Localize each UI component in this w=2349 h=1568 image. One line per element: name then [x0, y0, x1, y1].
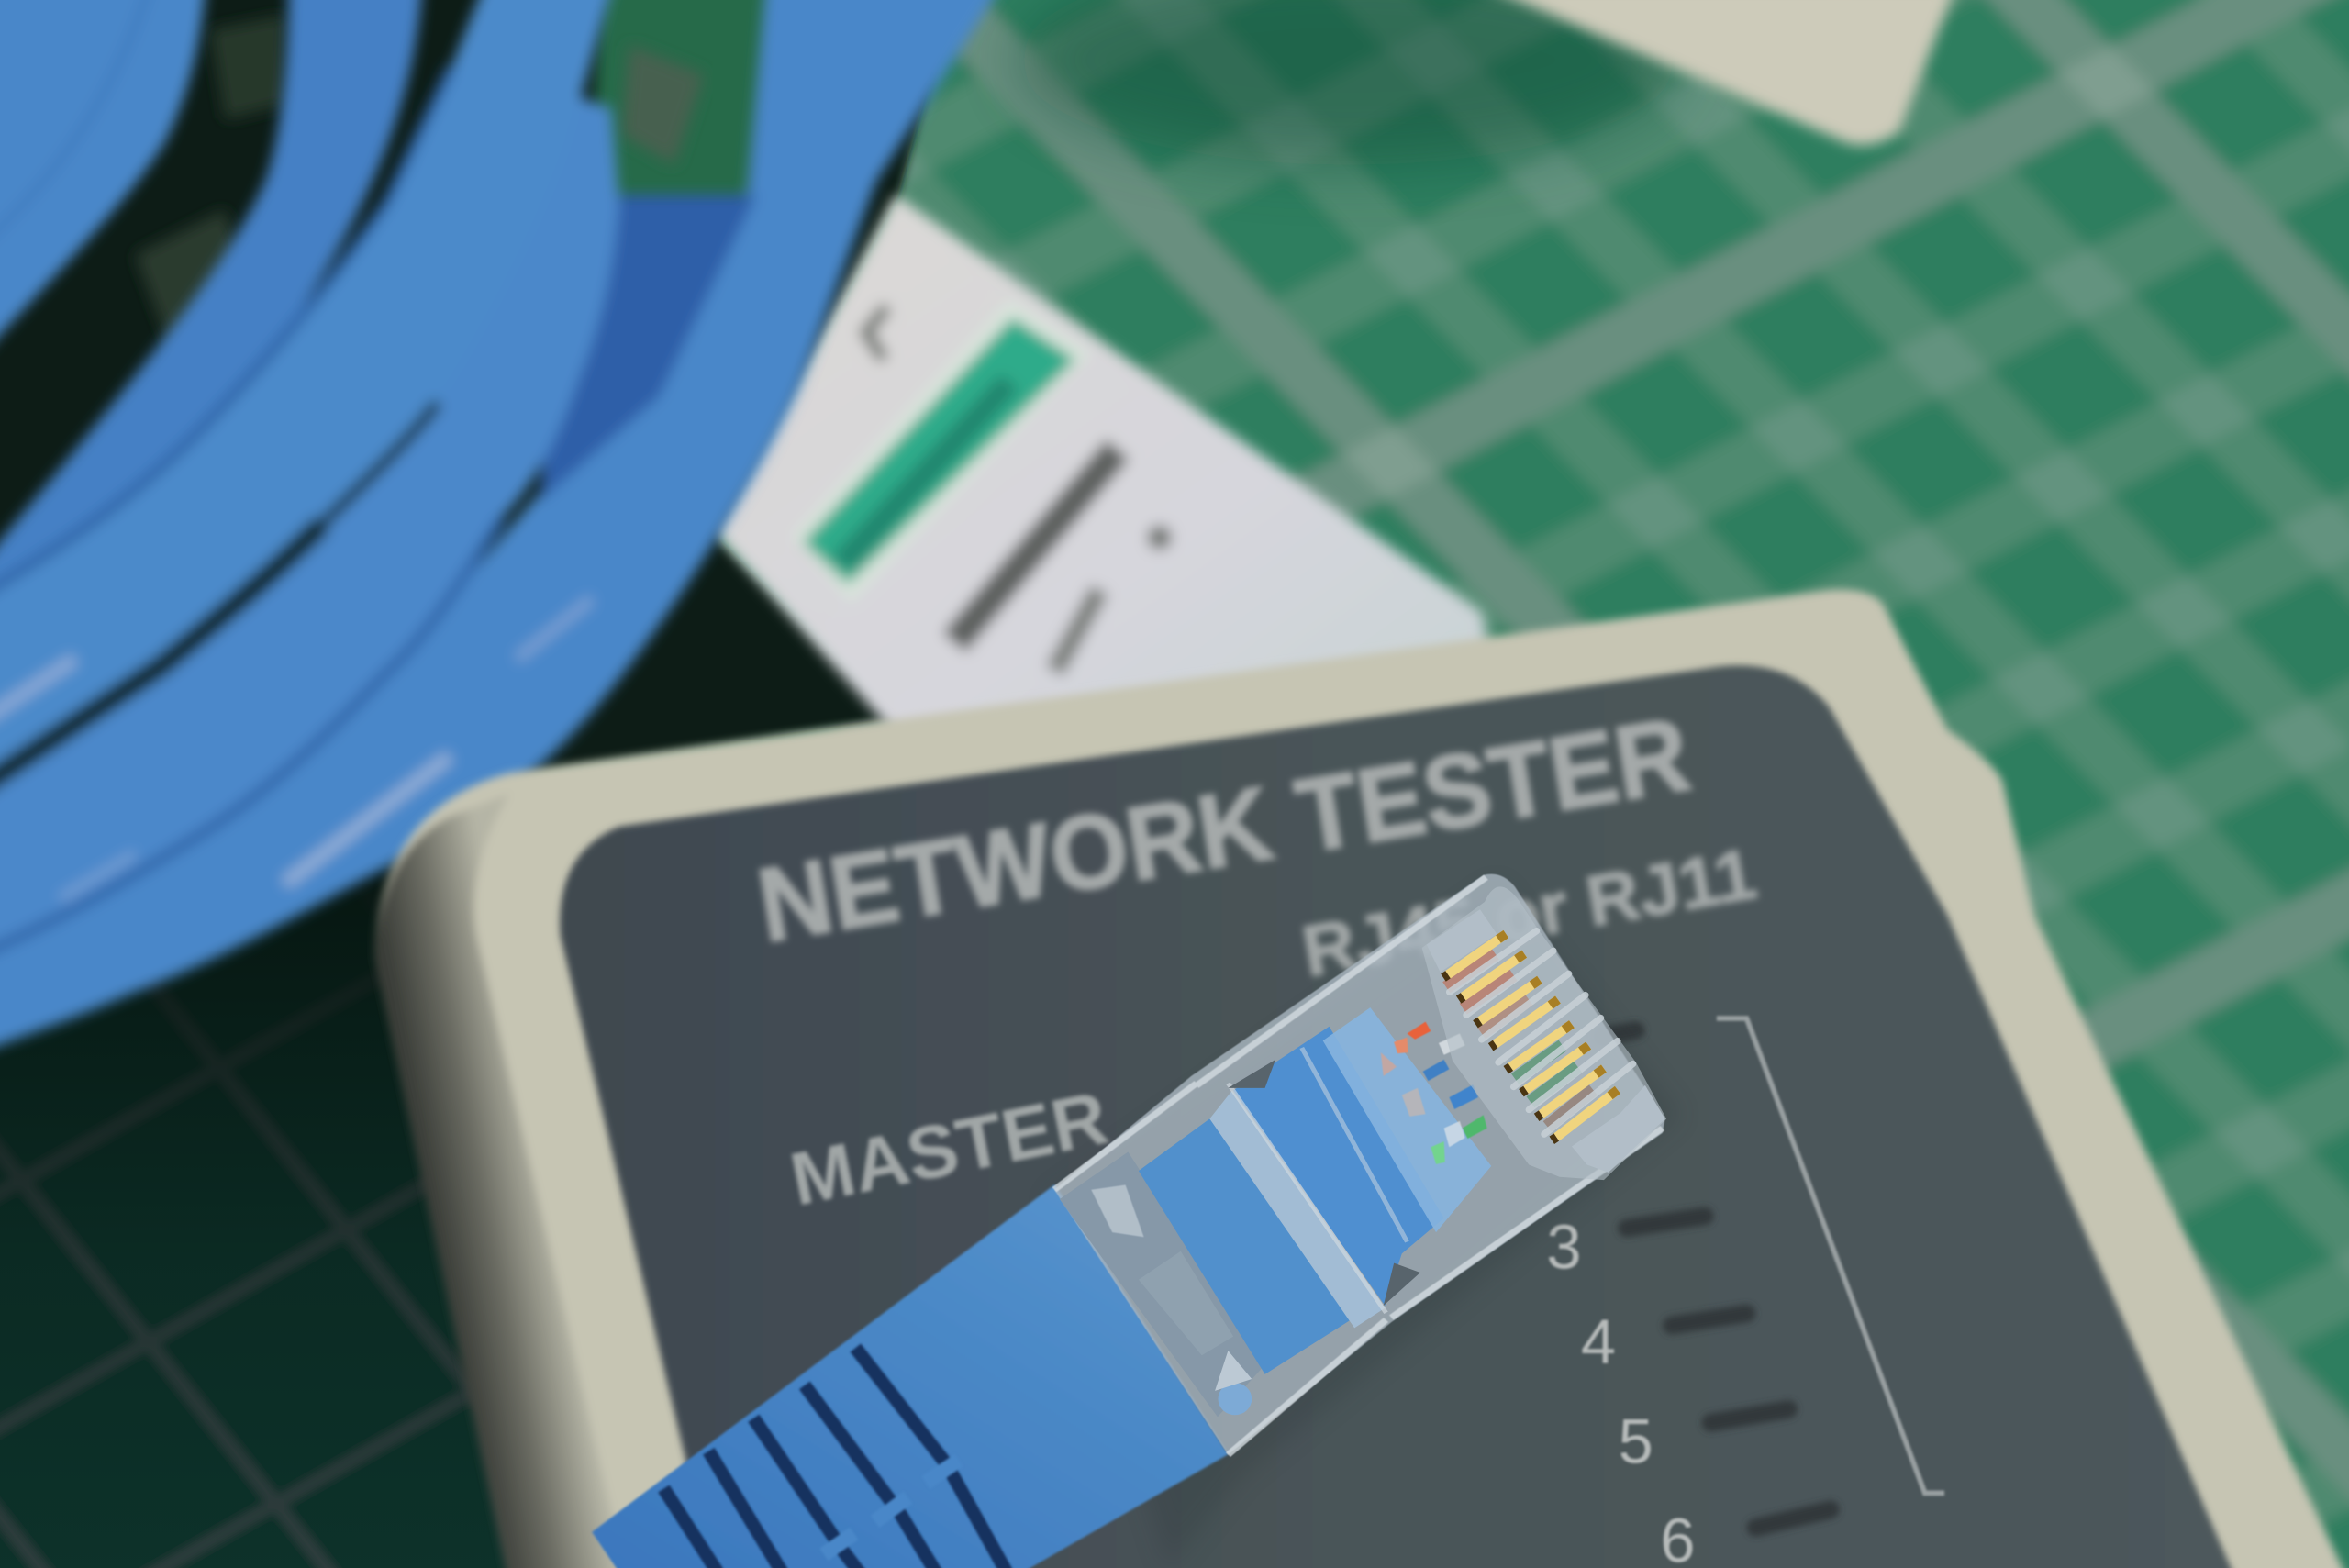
label: MASTER: MASTER	[784, 1076, 1115, 1222]
cable strand outer	[0, 0, 1011, 1056]
tester dark face	[560, 665, 2240, 1568]
network tester device	[374, 590, 2349, 1568]
boot ridge bridges	[824, 1460, 959, 1554]
bracket line beside LEDs	[1717, 1018, 1944, 1493]
coloured wires	[1381, 1022, 1487, 1164]
paper cable label	[715, 195, 1498, 756]
blue coiled network cables	[0, 0, 1011, 1056]
shell edge highlights	[1054, 877, 1663, 1455]
LED indicator slots	[1603, 1030, 1831, 1528]
blue strain relief boot	[592, 1184, 1229, 1568]
heading: NETWORK TESTER: NETWORK TESTER	[751, 696, 1698, 964]
blue latch section	[1139, 1118, 1354, 1374]
boot ridge slots	[663, 1348, 1007, 1568]
dark mat area behind cables and bottom left	[0, 0, 959, 1568]
cable strand second	[0, 0, 423, 629]
separator fins	[1450, 931, 1633, 1134]
cable highlights	[0, 599, 592, 898]
tester housing	[374, 590, 2349, 1568]
cable strand top left	[0, 0, 207, 367]
contact blades	[1443, 934, 1618, 1140]
clear plastic shell	[1054, 874, 1665, 1455]
white accessory at top right	[1483, 0, 1956, 145]
window with moulded pin	[1060, 1151, 1265, 1417]
RJ45 plug	[592, 874, 1681, 1568]
pin numbers: 3	[1546, 1212, 1581, 1283]
transparent plug head	[1054, 874, 1665, 1455]
contact block	[1422, 886, 1666, 1180]
cable strand fourth	[0, 90, 618, 959]
pin numbers: 4	[1581, 1306, 1616, 1376]
pin numbers: 5	[1619, 1407, 1653, 1477]
end caps	[1427, 909, 1497, 973]
gold contacts and fins	[1422, 886, 1666, 1180]
cable strand third	[0, 0, 618, 794]
plug shadow	[1049, 884, 1681, 1568]
pin numbers	[1546, 1212, 1696, 1568]
contact tint	[1446, 954, 1593, 1127]
label: RJ45 or RJ11: RJ45 or RJ11	[1297, 833, 1762, 992]
dark blue strand	[540, 195, 757, 502]
